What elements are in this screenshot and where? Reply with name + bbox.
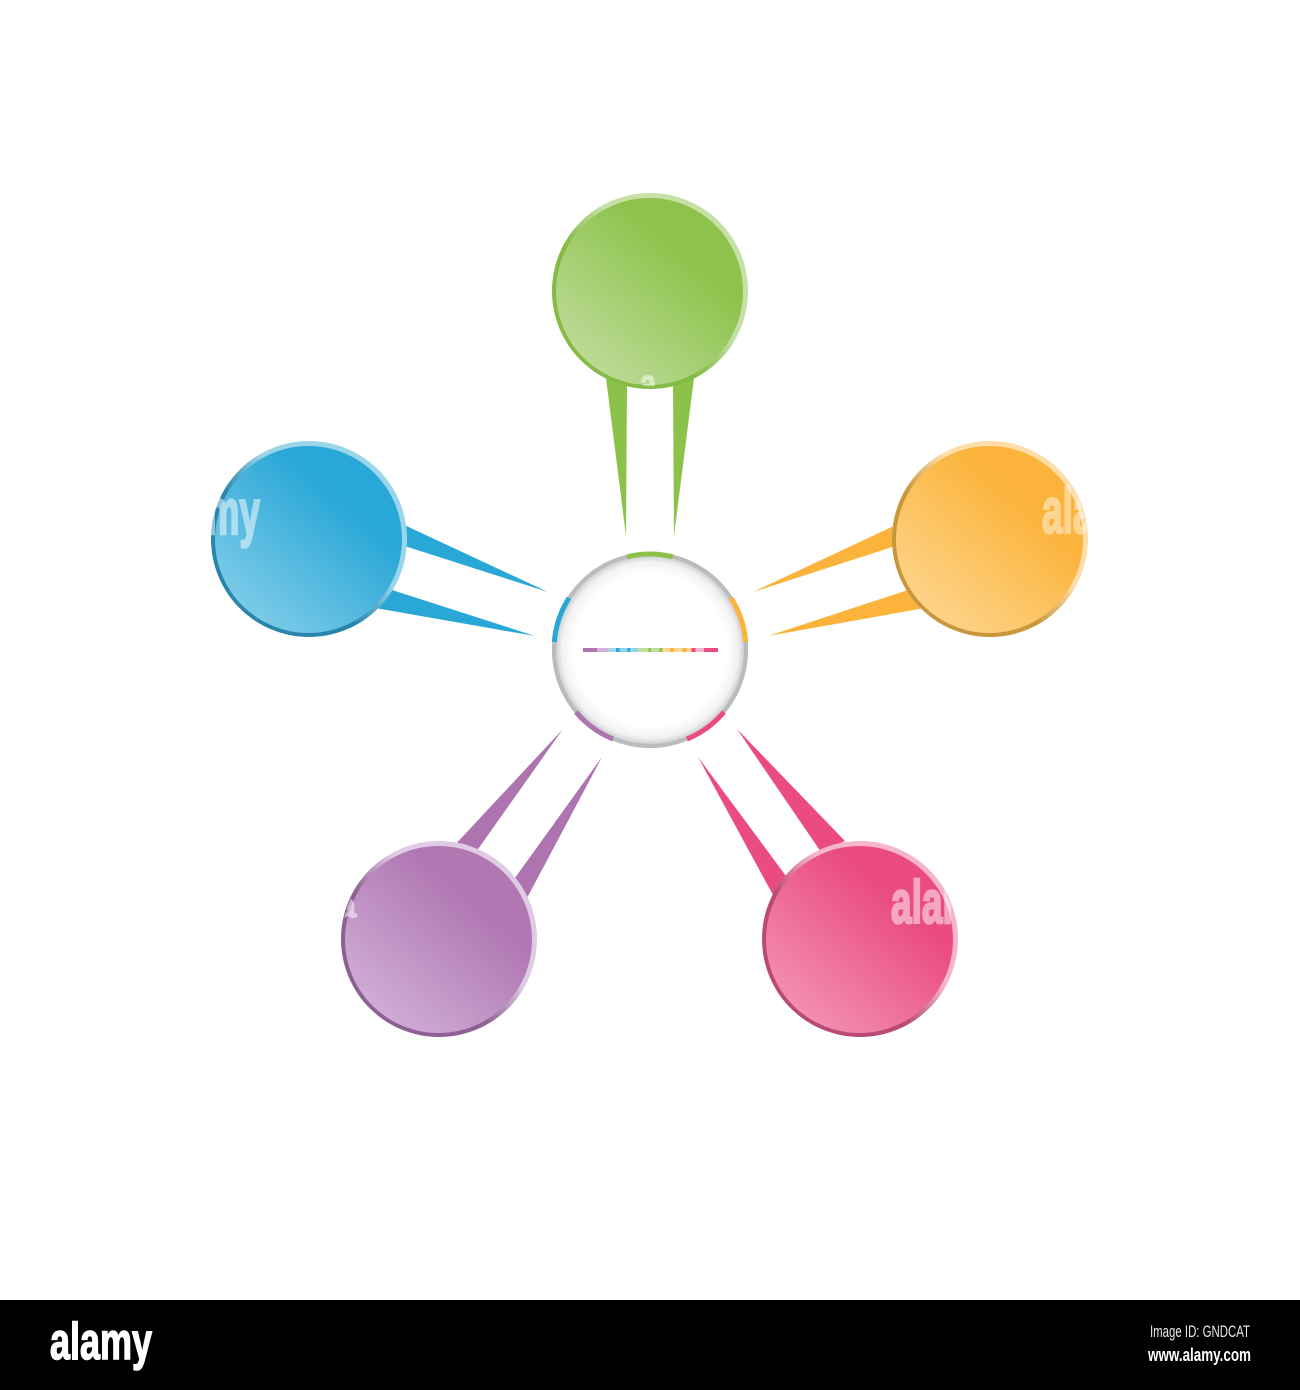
orange connector spikes — [753, 523, 922, 636]
purple connector spikes — [453, 729, 602, 898]
orange circle — [892, 441, 1088, 637]
rim accent: pink — [687, 712, 724, 739]
website: www.alamy.com — [1147, 1345, 1251, 1365]
footer logo: alamy — [50, 1313, 152, 1371]
purple watermark fragment: a — [335, 887, 357, 925]
hub gray rim — [554, 554, 746, 746]
blue watermark fragment: alamy — [155, 476, 260, 548]
rim accent: green — [627, 554, 673, 557]
image id: Image ID: GNDCAT — [1150, 1322, 1250, 1341]
node: blue — [211, 441, 548, 637]
node: green — [552, 193, 748, 536]
green circle — [552, 193, 748, 389]
pink circle — [762, 841, 958, 1037]
green connector spikes — [606, 378, 694, 536]
hub circle — [552, 552, 748, 748]
rim accent: purple — [576, 712, 613, 739]
footer bar — [0, 1300, 1300, 1390]
node: purple — [335, 729, 602, 1037]
blue connector spikes — [378, 523, 548, 636]
rim accent: orange — [731, 598, 746, 642]
pink connector spikes — [698, 729, 845, 895]
pink watermark fragment: alamy — [891, 869, 996, 936]
purple circle — [341, 841, 537, 1037]
blue circle — [211, 441, 407, 637]
green watermark fragment: a — [640, 362, 657, 406]
footer background — [0, 1300, 1300, 1390]
node: pink — [698, 729, 958, 1037]
multicolour divider line — [583, 648, 718, 652]
orange watermark fragment: alamy — [1042, 475, 1147, 547]
node: orange — [753, 441, 1088, 637]
central hub — [552, 552, 748, 748]
rim accent: blue — [554, 598, 569, 642]
